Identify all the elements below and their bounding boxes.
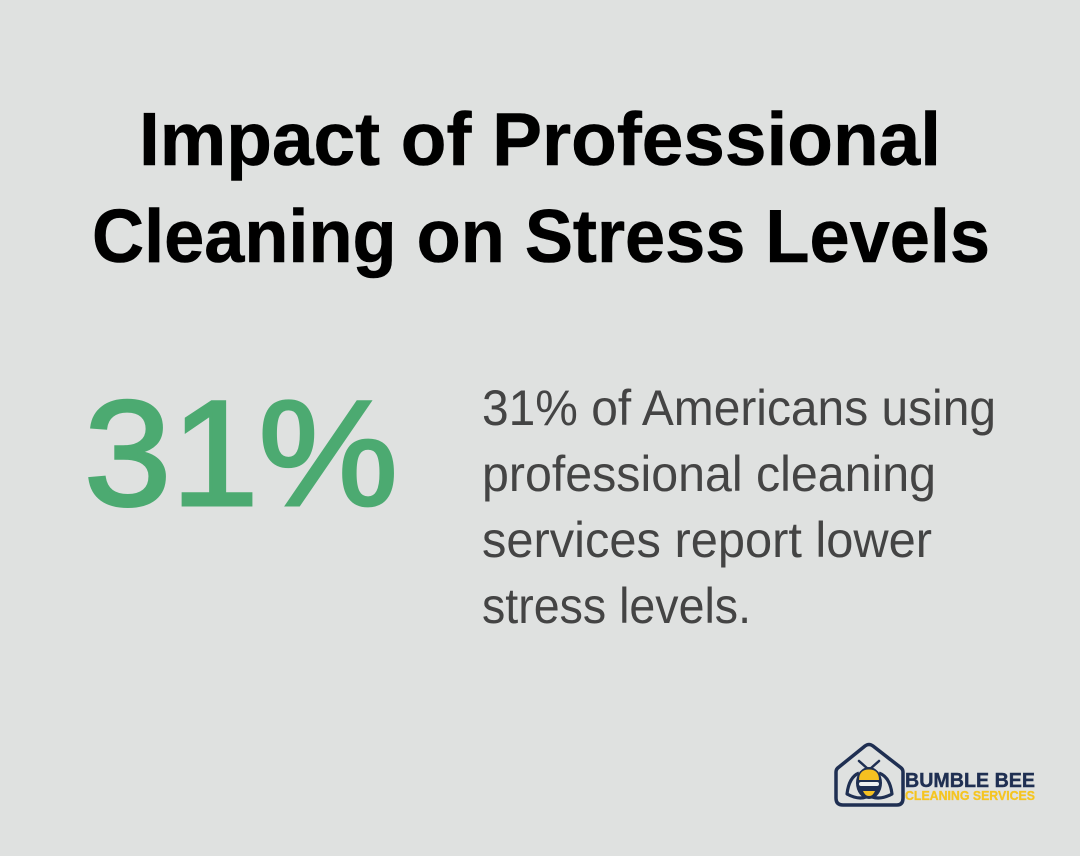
big statistic: 31%: 31% <box>84 369 398 537</box>
description text: 31% of Americans using <box>482 380 996 436</box>
description text: stress levels. <box>482 578 751 634</box>
title: Cleaning on Stress Levels <box>92 194 990 278</box>
description text: services report lower <box>482 512 932 568</box>
description text <box>482 380 996 634</box>
title: Impact of Professional <box>139 97 941 181</box>
title <box>92 97 990 278</box>
icon: house outline <box>836 744 903 805</box>
logo wordmark: BUMBLE BEE <box>905 770 1035 792</box>
description text: professional cleaning <box>482 446 936 502</box>
logo tagline: CLEANING SERVICES <box>905 789 1035 803</box>
icon: bee <box>847 761 892 799</box>
logo: Bumble Bee Cleaning Services <box>836 744 1035 805</box>
